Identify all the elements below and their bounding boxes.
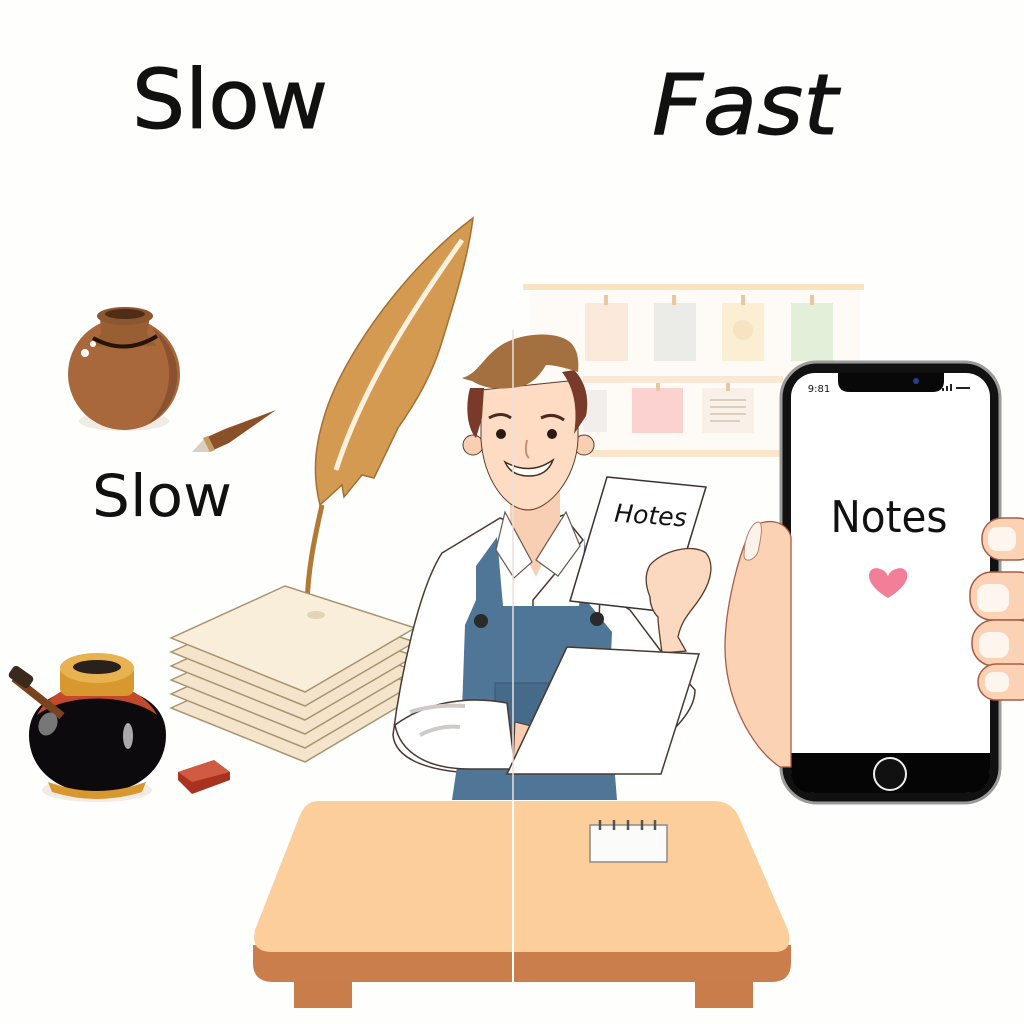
label: Slow: Slow [92, 462, 232, 530]
status time: 9:81 [808, 384, 830, 395]
hair sides [467, 370, 587, 438]
background pinboard [523, 284, 864, 457]
character: man with apron [393, 334, 695, 800]
table [253, 801, 791, 1008]
head [481, 380, 578, 510]
smartphone [781, 362, 1000, 803]
icon: spiral notepad [590, 820, 667, 862]
icon: black ink bottle [7, 653, 166, 802]
apron [452, 536, 617, 800]
hand holding card [646, 549, 711, 653]
icon: feather quill [307, 218, 473, 604]
heading: Slow: Slow [132, 53, 328, 148]
icon: small pen [192, 410, 276, 452]
ears [463, 435, 483, 455]
status icons [943, 384, 970, 391]
icon: brown clay pot [68, 307, 180, 431]
shirt [393, 515, 583, 773]
right sleeve [595, 590, 695, 765]
hair [462, 334, 578, 389]
icon: heart [869, 568, 907, 598]
neck and collar [510, 490, 560, 577]
screen label: Notes: Notes [830, 492, 948, 543]
fingers [970, 518, 1024, 700]
heading: Fast: Fast [652, 56, 841, 154]
hand thumb [725, 522, 791, 767]
note card: Hotes: Hotes [614, 499, 688, 533]
center divider [512, 330, 514, 800]
icon: paper stack [171, 586, 415, 762]
left hand [513, 722, 531, 770]
icon: eraser [178, 760, 230, 794]
left forearm [395, 700, 515, 769]
note card: Hotes [570, 477, 706, 612]
thumbnail [744, 522, 761, 560]
sheet of paper [507, 647, 699, 774]
face [489, 414, 564, 420]
